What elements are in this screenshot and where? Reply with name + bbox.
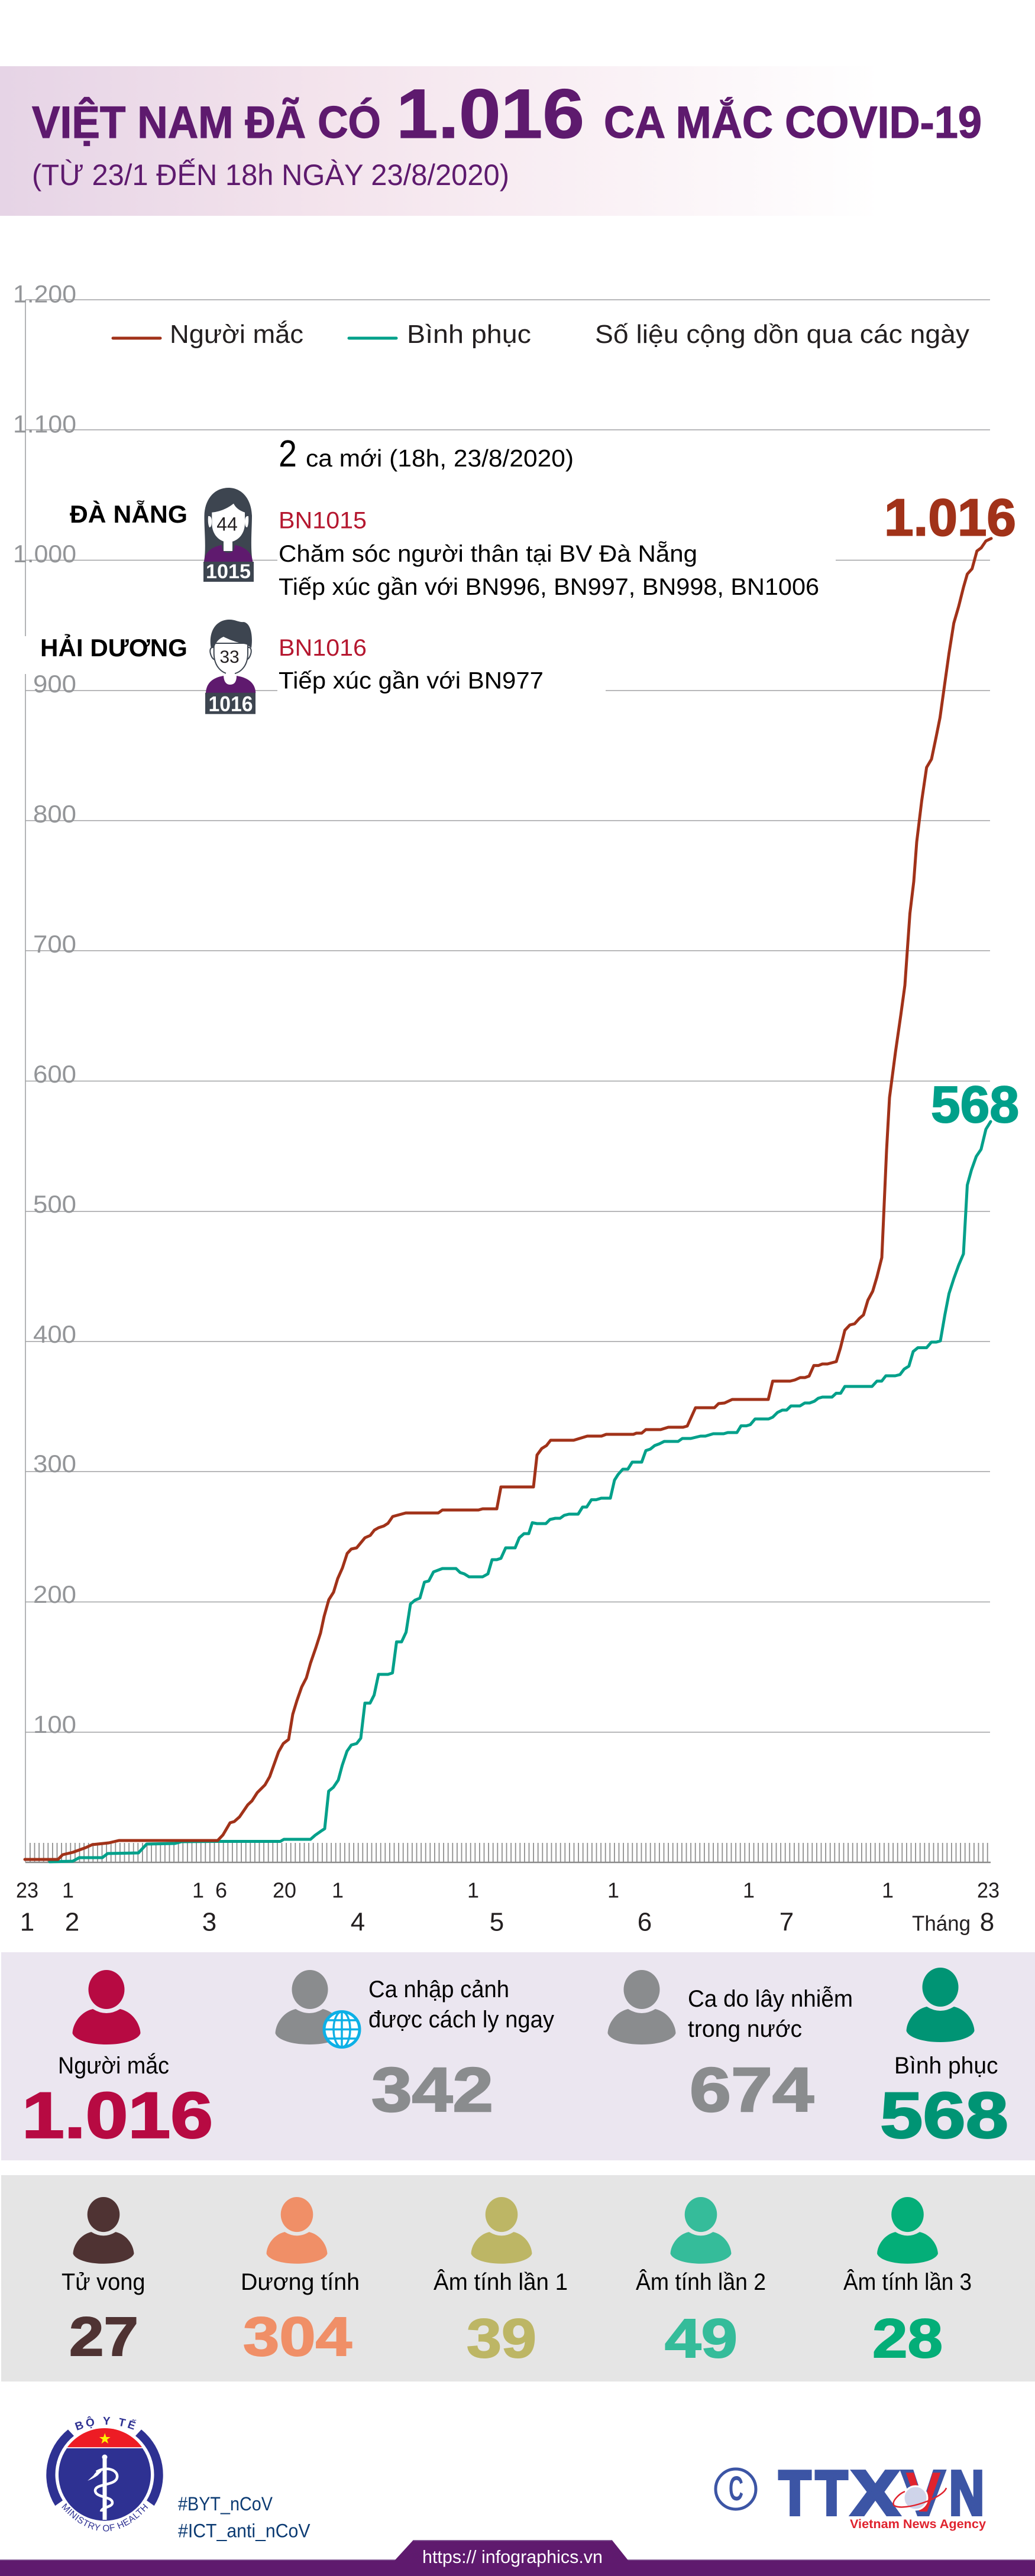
x axis day labels: 1 [332, 1878, 344, 1903]
line chart [13, 280, 1019, 1937]
stat: infected: 1.016 [22, 2079, 213, 2152]
stat: negative twice: Âm tính lần 2 [636, 2269, 766, 2295]
stat: infected: Người mắc [58, 2052, 169, 2079]
x axis month labels: 3 [202, 1907, 216, 1937]
legend: Bình phục [407, 320, 531, 349]
hashtags [178, 2493, 310, 2542]
y axis labels: 600 [33, 1060, 76, 1088]
x axis day labels: 1 [882, 1878, 894, 1903]
patient 1015 details: Tiếp xúc gần với BN996, BN997, BN998, BN1006 [279, 574, 819, 600]
new cases heading: ca mới (18h, 23/8/2020) [306, 445, 574, 472]
avatar: patient 1015: 1015 [206, 560, 251, 583]
panel: patient status [1, 2175, 1035, 2381]
stat: positive [241, 2269, 360, 2367]
x axis ticks [25, 1853, 991, 1862]
icon: recovered person [906, 1968, 975, 2042]
icon: infected person [72, 1970, 141, 2044]
x axis month labels: 8 [980, 1907, 994, 1937]
grid lines and axis [25, 300, 990, 1862]
stat: deaths: Tử vong [62, 2269, 145, 2295]
x axis month labels: Tháng [912, 1911, 971, 1936]
stat: positive: 304 [243, 2306, 352, 2367]
stat: recovered: Bình phục [894, 2053, 998, 2079]
icon: deaths [73, 2197, 134, 2264]
logo: TTXVN: T [816, 2458, 848, 2528]
footer bar [0, 2540, 1035, 2576]
stat: negative three times: 28 [872, 2308, 943, 2369]
x axis day labels: 23 [16, 1878, 38, 1903]
logo: Ministry of Health [46, 2416, 163, 2532]
title: CA MẮC COVID-19 [604, 97, 982, 148]
avatar: patient 1016: 33 [219, 647, 240, 667]
x axis day labels: 1 [62, 1878, 74, 1903]
y axis labels: 1.000 [13, 540, 76, 568]
x axis day labels [16, 1878, 1000, 1903]
x axis day labels: 23 [977, 1878, 1000, 1903]
stat: infected [22, 2052, 213, 2152]
stat: negative once: 39 [467, 2308, 536, 2369]
stat: recovered [880, 2053, 1008, 2152]
logo: Ministry of Health: BỘ Y TẾ [75, 2416, 137, 2431]
patient 1015 details [279, 507, 819, 600]
patient 1015 details: Chăm sóc người thân tại BV Đà Nẵng [279, 540, 697, 567]
x axis day labels: 6 [215, 1878, 227, 1903]
hashtags: #BYT_nCoV [178, 2493, 273, 2515]
patient 1016 details [279, 635, 544, 694]
location: Đà Nẵng: ĐÀ NẴNG [70, 500, 187, 528]
logo: TTXVN: C [729, 2470, 743, 2508]
y axis labels: 400 [33, 1320, 76, 1348]
x axis day labels: 20 [273, 1878, 296, 1903]
y axis labels: 500 [33, 1190, 76, 1218]
logo: TTXVN: V [905, 2461, 941, 2524]
new cases callout [12, 432, 819, 716]
x axis day labels: 1 [467, 1878, 479, 1903]
x axis month labels: 6 [638, 1907, 652, 1937]
stat: domestic cases: 674 [690, 2055, 814, 2125]
logo: TTXVN: V [902, 2458, 945, 2528]
icon: imported case person [276, 1970, 343, 2044]
stat: negative three times [843, 2269, 972, 2369]
end value: recovered: 568 [931, 1076, 1019, 1133]
stat: negative three times: Âm tính lần 3 [843, 2269, 972, 2295]
stat: imported cases: được cách ly ngay [368, 2007, 554, 2033]
logo: TTXVN: Vietnam News Agency [850, 2517, 986, 2531]
icon: globe [324, 2011, 360, 2047]
icon: domestic case person [608, 1970, 675, 2044]
y axis labels: 100 [33, 1710, 76, 1738]
x axis month labels: 2 [65, 1907, 79, 1937]
y axis labels [13, 280, 76, 1738]
avatar: patient 1016: 1016 [208, 692, 253, 716]
stat: imported cases: Ca nhập cảnh [368, 1976, 509, 2003]
title [32, 75, 982, 153]
avatar: patient 1015 [203, 488, 254, 583]
new cases heading: 2 [279, 432, 297, 475]
x axis month labels: 7 [780, 1907, 794, 1937]
title: 1.016 [396, 75, 584, 153]
y axis labels: 200 [33, 1580, 76, 1608]
icon: negative once [471, 2197, 532, 2264]
y axis labels: 900 [33, 670, 76, 698]
recovered line [50, 1122, 991, 1862]
icon: negative twice [671, 2197, 731, 2264]
legend: Số liệu cộng dồn qua các ngày [595, 320, 969, 349]
y axis labels: 800 [33, 800, 76, 828]
stat: negative twice [636, 2269, 766, 2369]
x axis day labels: 1 [607, 1878, 619, 1903]
y axis labels: 1.200 [13, 280, 76, 307]
location: Hải Dương [12, 633, 189, 674]
legend [113, 320, 969, 349]
header band [0, 66, 1035, 216]
y axis labels: 300 [33, 1450, 76, 1477]
avatar: patient 1016 [205, 620, 255, 716]
x axis day labels: 1 [192, 1878, 204, 1903]
avatar: patient 1015: 44 [216, 514, 238, 535]
logo: TTXVN: X [852, 2458, 899, 2528]
x axis month labels: 5 [490, 1907, 504, 1937]
icon: positive [267, 2197, 327, 2264]
patient 1016 details: Tiếp xúc gần với BN977 [279, 668, 544, 694]
subtitle: (TỪ 23/1 ĐẾN 18h NGÀY 23/8/2020) [32, 158, 509, 192]
stat: domestic cases: trong nước [688, 2016, 802, 2042]
logo: TTXVN: N [949, 2458, 984, 2528]
y axis labels: 1.100 [13, 410, 76, 438]
icon: negative three times [877, 2197, 938, 2264]
stat: negative once [434, 2269, 568, 2369]
stat: recovered: 568 [880, 2079, 1008, 2152]
title: VIỆT NAM ĐÃ CÓ [32, 97, 381, 148]
end value: infected: 1.016 [884, 488, 1016, 546]
logo: TTXVN: T [779, 2458, 811, 2528]
stat: domestic cases: Ca do lây nhiễm [688, 1985, 853, 2012]
stat: imported cases [368, 1976, 554, 2125]
y axis labels: 700 [33, 930, 76, 958]
logo: Ministry of Health: MINISTRY OF HEALTH [62, 2503, 148, 2532]
stat: imported cases: 342 [371, 2055, 493, 2125]
x axis month labels: 4 [351, 1907, 365, 1937]
website url: https:// infographics.vn [422, 2546, 603, 2567]
x axis month labels: 1 [20, 1907, 34, 1937]
logo: TTXVN [716, 2458, 986, 2531]
stat: deaths: 27 [69, 2306, 138, 2367]
infected line [25, 539, 991, 1859]
stat: negative once: Âm tính lần 1 [434, 2269, 568, 2295]
location: Hải Dương: HẢI DƯƠNG [40, 633, 187, 662]
stat: domestic cases [688, 1985, 853, 2125]
patient 1015 details: BN1015 [279, 507, 367, 533]
stat: negative twice: 49 [665, 2308, 738, 2369]
x axis day labels: 1 [743, 1878, 755, 1903]
hashtags: #ICT_anti_nCoV [178, 2520, 310, 2542]
new cases heading [279, 432, 574, 475]
x axis month labels [20, 1907, 994, 1937]
legend: Người mắc [170, 320, 303, 349]
stat: positive: Dương tính [241, 2269, 360, 2295]
patient 1016 details: BN1016 [279, 635, 367, 661]
panel: main totals [1, 1952, 1035, 2160]
stat: deaths [62, 2269, 145, 2367]
